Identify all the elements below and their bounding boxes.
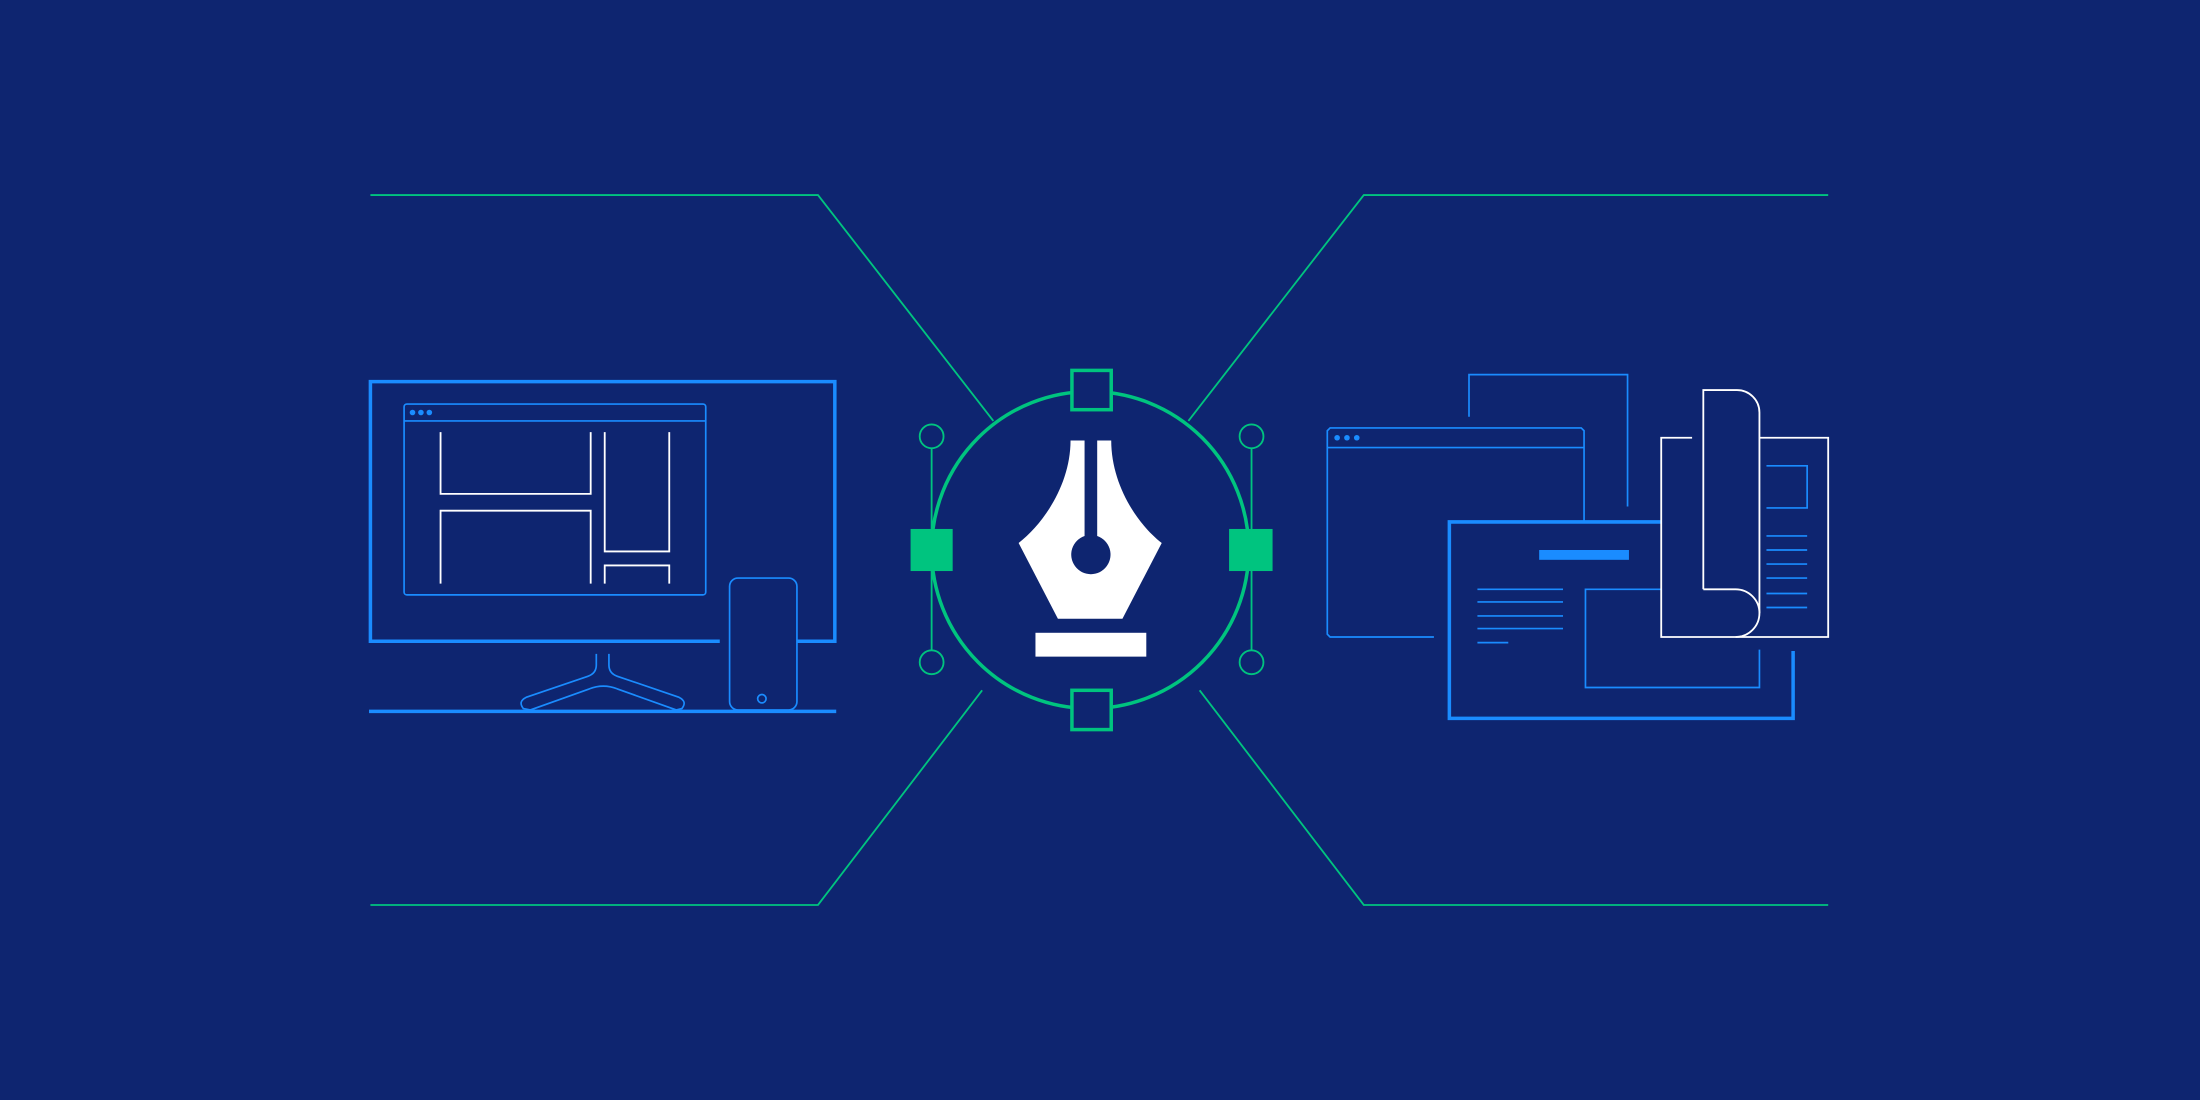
icon: pen nib [1019, 441, 1162, 657]
center: pen tool badge [911, 370, 1273, 730]
right: documents [1327, 375, 1828, 718]
connector lines [370, 195, 1828, 905]
left: monitor and phone [369, 382, 836, 711]
